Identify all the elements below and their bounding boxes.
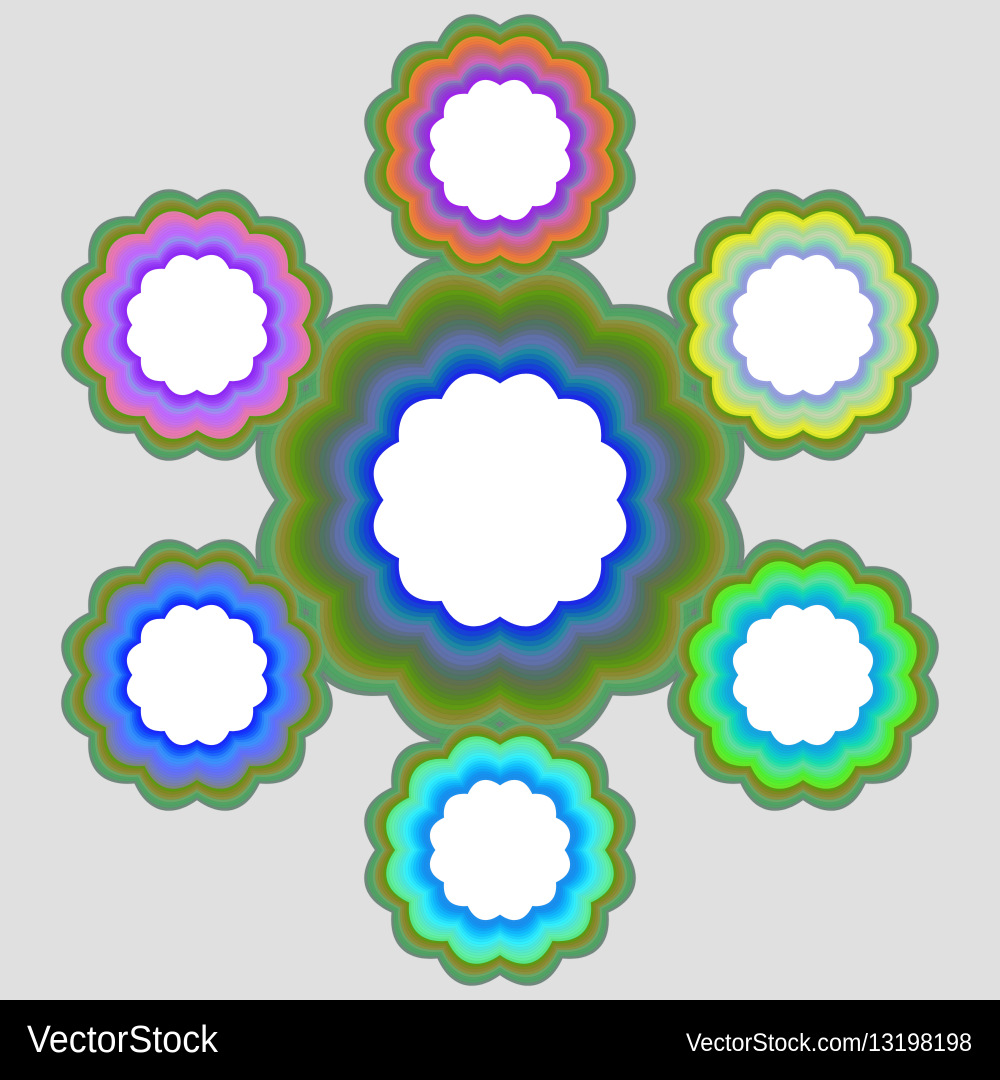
footer bar xyxy=(0,1000,1000,1080)
top flower: orange, pink and purple rings xyxy=(364,14,636,286)
bottom flower: mint and cyan rings xyxy=(364,714,636,986)
lower-right flower: green and teal rings xyxy=(667,539,939,811)
footer logo text: VectorStock xyxy=(27,1019,219,1061)
shared outer rims of all flowers xyxy=(61,14,939,986)
upper-right flower: yellow and pale green rings xyxy=(667,189,939,461)
upper-left flower: pink and violet rings xyxy=(61,189,333,461)
center flower: blue and olive rings xyxy=(256,256,744,744)
lower-left flower: blue rings xyxy=(61,539,333,811)
footer image id text: VectorStock.com/13198198 xyxy=(686,1029,972,1057)
